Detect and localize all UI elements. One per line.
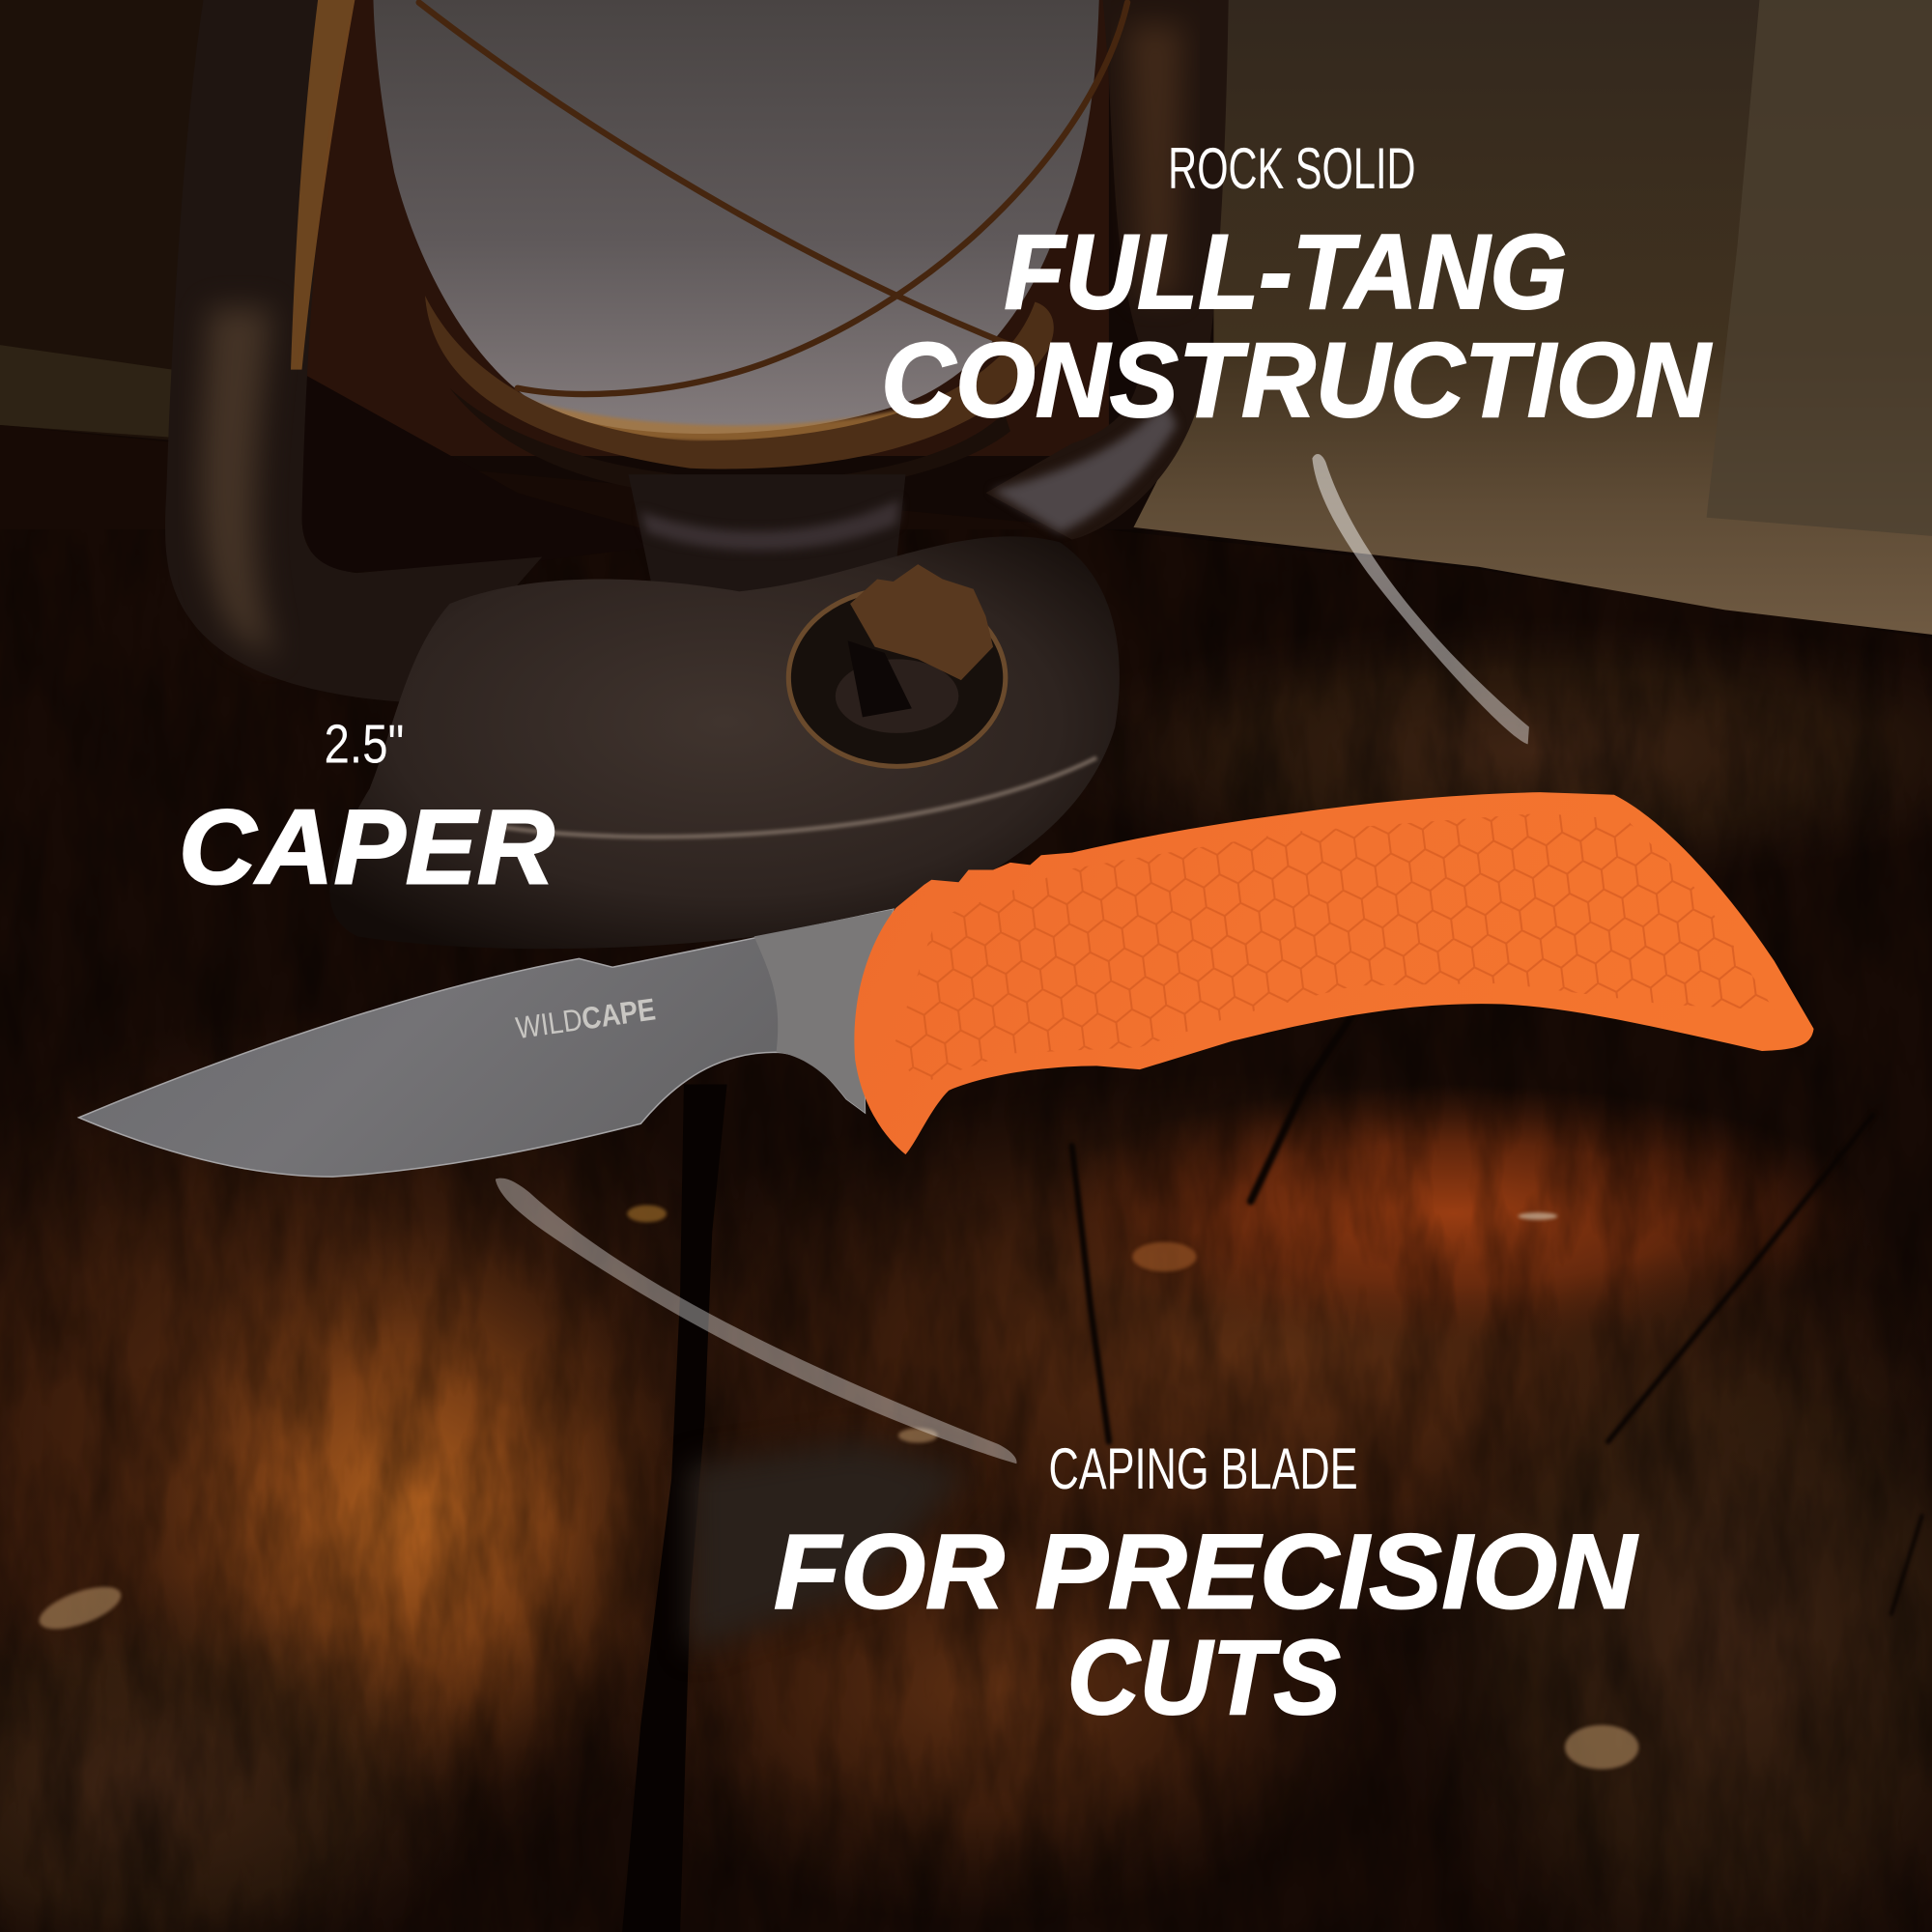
- knob seat: [788, 589, 1006, 766]
- lantern frame interior: [296, 0, 1109, 456]
- title line: full-tang: FULL-TANG: [1005, 213, 1567, 331]
- eyebrow: caping blade: CAPING BLADE: [1048, 1436, 1358, 1501]
- base edge highlight: [493, 757, 1096, 837]
- blade logo: WILDCAPE: [514, 991, 658, 1045]
- bottom left plank: [0, 1577, 493, 1932]
- handle hex texture: [895, 813, 1770, 1080]
- right post rust: [1127, 25, 1182, 296]
- title: caper: CAPER: [179, 789, 554, 907]
- bag pocket: [1707, 0, 1932, 536]
- bail wires: [419, 3, 1127, 394]
- knife blade: [79, 909, 894, 1177]
- lantern neck: [629, 474, 906, 591]
- table cracks: [1072, 1010, 1922, 1614]
- lantern base dome: [329, 536, 1120, 949]
- heading: for precision cuts: [774, 1436, 1639, 1737]
- table dark base: [0, 425, 1932, 1932]
- crack rough patch: [690, 1441, 967, 1651]
- heading: caper: [179, 714, 554, 907]
- left post rust: [201, 308, 277, 659]
- handle body: [854, 792, 1814, 1154]
- upper right plank: [1023, 616, 1932, 887]
- left plank glow: [124, 1220, 690, 1811]
- knife: [79, 777, 1824, 1177]
- right plank lower glow: [579, 1454, 1392, 1922]
- eyebrow: size: 2.5": [324, 714, 404, 775]
- far right plank: [1380, 1244, 1932, 1932]
- callout stroke: full-tang: [1312, 454, 1529, 744]
- right plank mid glow: [579, 1072, 1932, 1638]
- blade ricasso: [754, 909, 894, 1113]
- heading: full-tang construction: [881, 136, 1713, 440]
- neck highlight: [640, 499, 899, 551]
- globe warm glow: [493, 388, 936, 441]
- title line: construction: CONSTRUCTION: [881, 322, 1713, 440]
- lantern left post: [165, 0, 542, 702]
- title line: for precision: FOR PRECISION: [774, 1514, 1639, 1632]
- callout stroke: caping blade: [496, 1179, 1016, 1463]
- lantern right post: [985, 0, 1229, 540]
- left cloth strip: [0, 345, 173, 438]
- canvas bag: [1133, 0, 1932, 635]
- lantern: [165, 0, 1229, 949]
- eyebrow: rock solid: ROCK SOLID: [1168, 136, 1416, 201]
- knob shadow: [848, 640, 912, 717]
- wooden table: [0, 425, 1932, 1932]
- rim dark band: [450, 388, 1010, 496]
- wood grain: [0, 529, 1932, 1932]
- wood chips: [34, 1205, 1638, 1770]
- lower rim: [425, 296, 1054, 469]
- glass globe: [373, 0, 1099, 434]
- knife handle: [854, 777, 1824, 1154]
- top-left dark cloth: [0, 0, 210, 443]
- knob lower: [836, 659, 958, 733]
- interior lower: [296, 370, 690, 573]
- right plank orange reflection: [1035, 1084, 1873, 1343]
- title line: cuts: CUTS: [1067, 1619, 1341, 1737]
- left plank broad tone: [0, 985, 826, 1932]
- left post highlight: [291, 0, 355, 370]
- central crack: [622, 1084, 727, 1932]
- knob cap: [850, 564, 993, 680]
- blade body: [79, 909, 894, 1177]
- right post highlight: [992, 401, 1177, 532]
